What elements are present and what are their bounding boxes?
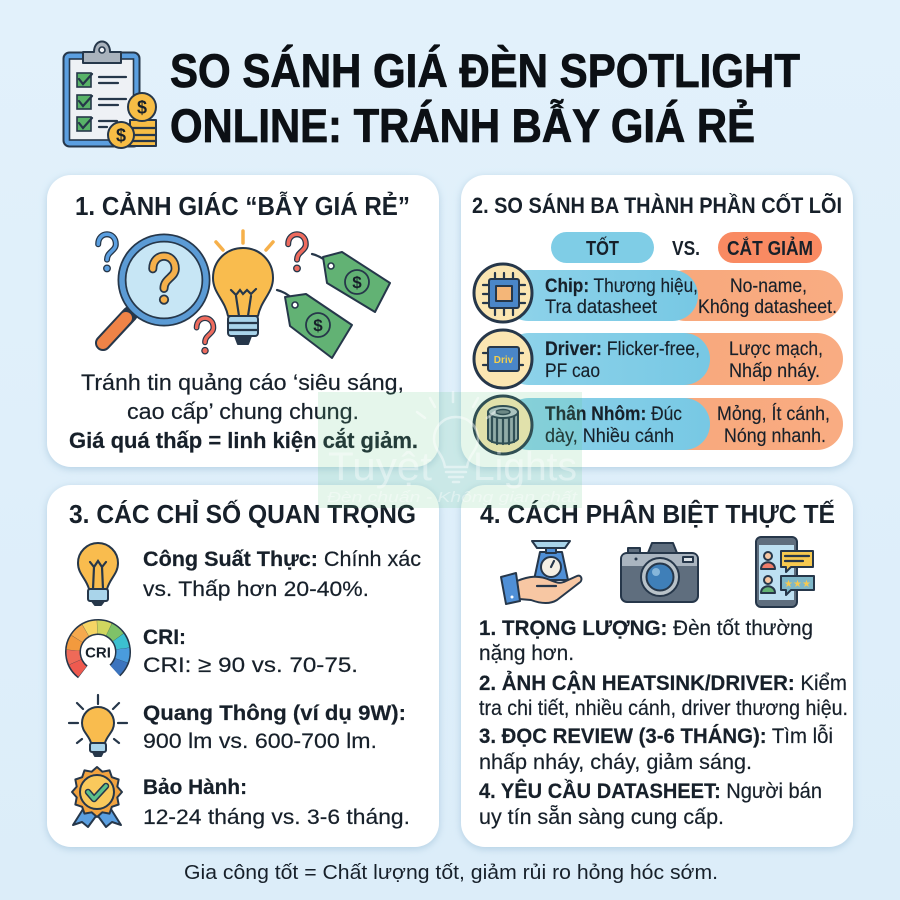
row: chip: Tra datasheet (545, 297, 658, 318)
text: quang thông: 900 lm vs. 600-700 lm. (143, 729, 377, 753)
icon: question marks (98, 234, 306, 354)
icon: light bulb (213, 231, 273, 344)
row: chip: Không datasheet. (698, 297, 837, 318)
icon: warranty medal (72, 767, 122, 827)
row: chip (474, 264, 843, 322)
text: công suất thực: Công Suất Thực: Chính xác (143, 547, 421, 571)
text: panel 1 body: cao cấp’ chung chung. (127, 399, 359, 424)
heading: panel 4: 4. CÁCH PHÂN BIỆT THỰC TẾ (480, 499, 835, 529)
text: panel 1 body (69, 370, 418, 453)
text: driver bad: Lược mạch, (729, 339, 823, 360)
text: chip good: Chip: Thương hiệu, (545, 276, 698, 297)
footer note: Gia công tốt = Chất lượng tốt, giảm rủi ro hỏng hóc sớm. (184, 862, 718, 884)
text: tips list: 2. ẢNH CẬN HEATSINK/DRIVER: Kiểm (479, 670, 847, 695)
text: tips list: 3. ĐỌC REVIEW (3-6 THÁNG): Tìm lỗi (479, 723, 833, 748)
text: CRI (143, 625, 358, 677)
text: bảo hành: Bảo Hành: (143, 775, 247, 799)
icon: chip (474, 264, 532, 322)
text: bảo hành: 12-24 tháng vs. 3-6 tháng. (143, 805, 410, 829)
watermark: Tuyệt Lights: Lights (473, 445, 577, 489)
text: tips list: nhấp nháy, cháy, giảm sáng. (479, 750, 752, 774)
text: tips list: 4. YÊU CẦU DATASHEET: Người bán (479, 778, 822, 803)
icon: clipboard with checklist and coins: $ (116, 126, 126, 146)
panel: cảnh giác bẫy giá rẻ (47, 175, 439, 467)
column header: cắt giảm: CẮT GIẢM (727, 236, 813, 260)
text: panel 1 body: Tránh tin quảng cáo ‘siêu sáng, (81, 370, 404, 395)
panel: cách phân biệt thực tế (461, 485, 853, 847)
icon: clipboard with checklist and coins (64, 42, 156, 148)
text: tips list: tra chi tiết, nhiều cánh, driver thương hiệu. (479, 696, 848, 720)
row: thân nhôm (474, 396, 843, 454)
text: panel 1 body: Giá quá thấp = linh kiện cắt giảm. (69, 428, 418, 453)
text: tips list: 1. TRỌNG LƯỢNG: Đèn tốt thường (479, 616, 813, 640)
text: quang thông (143, 701, 406, 753)
watermark: Tuyệt Lights: Đèn chuẩn - Không gian chất (327, 489, 578, 506)
text: công suất thực (143, 547, 421, 601)
column header: tốt (551, 232, 654, 263)
icon: price tags: $ (313, 316, 323, 335)
title (170, 44, 800, 152)
text: công suất thực: vs. Thấp hơn 20-40%. (143, 577, 369, 601)
watermark: Tuyệt Lights (318, 392, 582, 508)
heading: panel 1: 1. CẢNH GIÁC “BẪY GIÁ RẺ” (75, 191, 410, 221)
text: quang thông: Quang Thông (ví dụ 9W): (143, 701, 406, 725)
icon: magnifier with question mark (103, 238, 206, 343)
icon: price tags: $ (352, 273, 362, 292)
icon: CRI gauge: CRI (85, 644, 111, 662)
watermark: Tuyệt Lights: Tuyệt (328, 445, 432, 489)
icon: camera (621, 543, 698, 602)
text: driver good: Driver: Flicker-free, (545, 339, 700, 360)
text: CRI: CRI: ≥ 90 vs. 70-75. (143, 653, 358, 677)
icon: heatsink (474, 396, 532, 454)
text: chip bad: No-name, (730, 276, 807, 297)
title: ONLINE: TRÁNH BẪY GIÁ RẺ (170, 99, 755, 152)
column header: tốt: TỐT (586, 236, 619, 260)
icon: CRI gauge (63, 617, 133, 687)
row: driver: PF cao (545, 361, 600, 382)
icon: luminous bulb (69, 695, 127, 756)
icon: driver: Driv (494, 355, 514, 366)
icon: clipboard with checklist and coins: $ (137, 98, 147, 118)
heading: panel 3: 3. CÁC CHỈ SỐ QUAN TRỌNG (69, 499, 416, 529)
text: CRI: CRI: (143, 625, 186, 649)
label: vs: VS. (672, 238, 700, 260)
text: tips list: nặng hơn. (479, 641, 574, 665)
icon: hand with scale (501, 541, 581, 604)
panel: so sánh ba thành phần cốt lõi (461, 175, 853, 467)
icon: phone with reviews: ★★★ (784, 579, 811, 590)
icon: driver (474, 330, 532, 388)
row: driver (474, 330, 843, 388)
icon: phone with reviews (756, 537, 814, 607)
text: bảo hành (143, 775, 410, 829)
heading: panel 2: 2. SO SÁNH BA THÀNH PHẦN CỐT LÕI (472, 192, 842, 218)
row: thân nhôm: Nóng nhanh. (724, 426, 826, 447)
column header: cắt giảm (718, 232, 822, 263)
text: thân nhôm bad: Mỏng, Ít cánh, (717, 404, 830, 425)
icon: price tags (277, 252, 390, 358)
panel: các chỉ số quan trọng (47, 485, 439, 847)
row: driver: Nhấp nháy. (729, 361, 820, 382)
title: SO SÁNH GIÁ ĐÈN SPOTLIGHT (170, 44, 800, 97)
icon: bulb (78, 543, 118, 605)
text: tips list: uy tín sẵn sàng cung cấp. (479, 803, 724, 829)
row: thân nhôm: dày, Nhiều cánh (545, 426, 674, 447)
text: thân nhôm good: Thân Nhôm: Đúc (545, 404, 682, 425)
text: tips list (479, 616, 848, 829)
